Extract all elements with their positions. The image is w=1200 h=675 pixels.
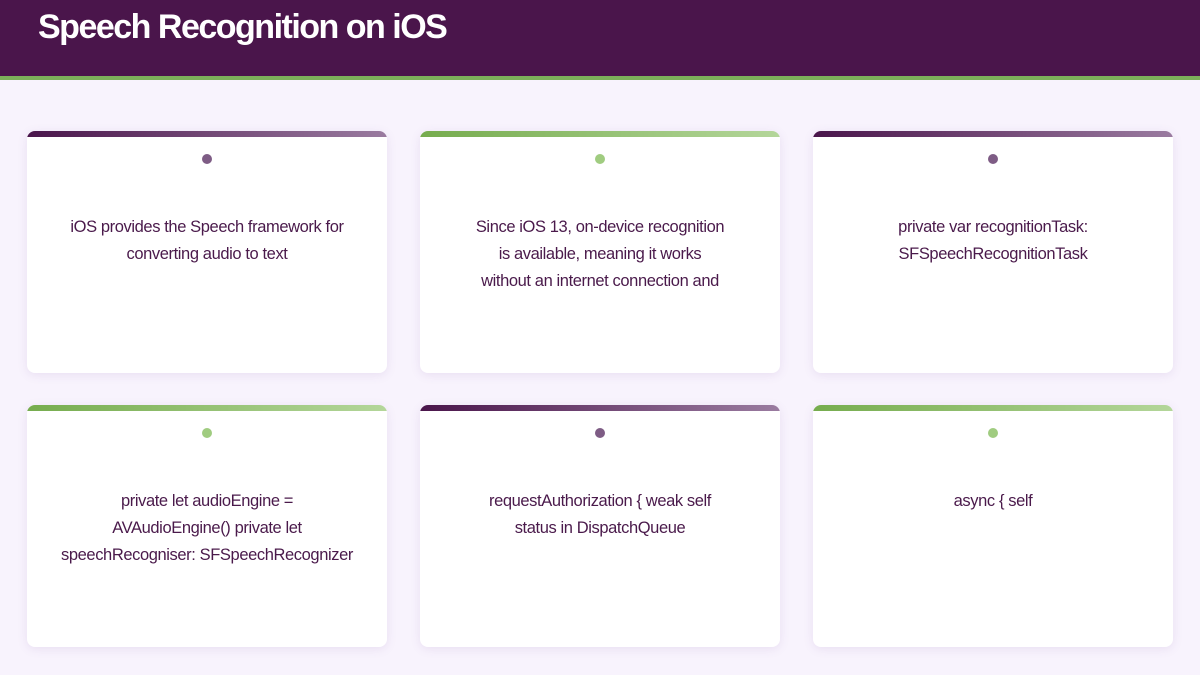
card 1 bbox=[27, 131, 387, 373]
card 6 text: async { self bbox=[954, 492, 1032, 510]
card 2 bbox=[420, 131, 780, 373]
card 4 text: speechRecogniser: SFSpeechRecognizer bbox=[61, 546, 353, 564]
card 1 text: converting audio to text bbox=[126, 245, 288, 263]
card 5 text: status in DispatchQueue bbox=[515, 519, 685, 537]
card 3 text: private var recognitionTask: bbox=[898, 218, 1088, 236]
card 2 text: is available, meaning it works bbox=[499, 245, 701, 263]
card 2 text: without an internet connection and bbox=[481, 272, 719, 290]
card 5 text: requestAuthorization { weak self bbox=[489, 492, 711, 510]
card 3 bbox=[813, 131, 1173, 373]
card 4 text: private let audioEngine = bbox=[121, 492, 293, 510]
card 5 text bbox=[489, 492, 712, 537]
card 4 bbox=[27, 405, 387, 647]
card 5 bbox=[420, 405, 780, 647]
card 1 text bbox=[70, 218, 344, 263]
card 3 text bbox=[898, 218, 1088, 263]
card 3 text: SFSpeechRecognitionTask bbox=[899, 245, 1087, 263]
title: Speech Recognition on iOS bbox=[38, 8, 446, 46]
card 1 text: iOS provides the Speech framework for bbox=[70, 218, 344, 236]
card 4 text bbox=[61, 492, 354, 564]
header bbox=[0, 0, 1200, 76]
card 2 text bbox=[476, 218, 724, 290]
card 6 bbox=[813, 405, 1173, 647]
card 4 text: AVAudioEngine() private let bbox=[112, 519, 302, 537]
card 2 text: Since iOS 13, on-device recognition bbox=[476, 218, 724, 236]
